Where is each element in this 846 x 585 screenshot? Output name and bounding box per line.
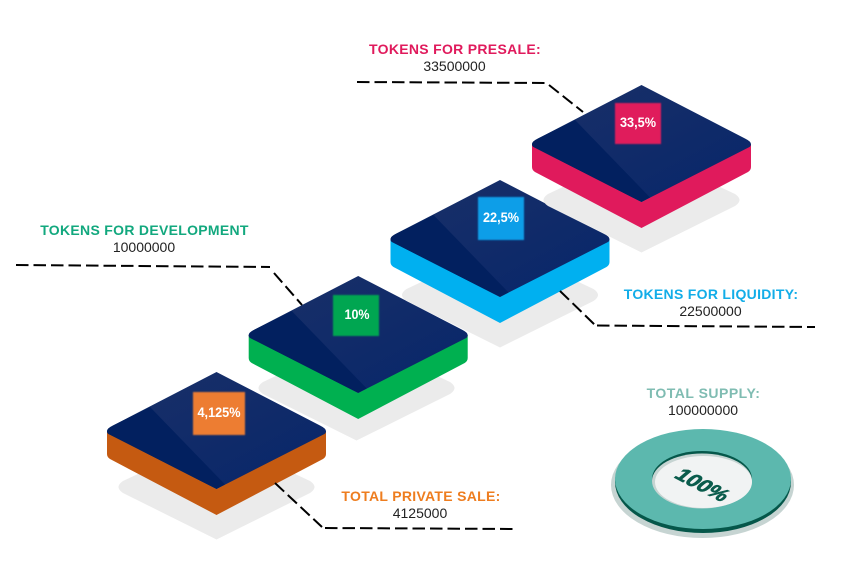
label: tokens for presale [369, 41, 541, 74]
label: tokens for presale: 33500000 [423, 58, 486, 74]
label: total private sale [341, 488, 501, 521]
label: tokens for development [40, 222, 249, 255]
leader line: private sale [275, 483, 514, 529]
leader line: presale [357, 82, 583, 112]
label: total private sale: TOTAL PRIVATE SALE: [341, 488, 501, 504]
badge: 22,5% [478, 197, 524, 240]
donut: total supply 100% [611, 429, 794, 538]
leader line: liquidity [560, 291, 815, 327]
shadow: private sale block [118, 437, 314, 540]
shadow: presale block [544, 150, 740, 252]
donut: total supply 100%: 100% [669, 465, 735, 505]
label: tokens for development: TOKENS FOR DEVELOPMENT [40, 222, 249, 238]
badge: 10% [333, 295, 379, 336]
block: tokens for development 10% [249, 276, 468, 419]
badge: 4,125% [193, 392, 245, 435]
shadow: liquidity block [402, 245, 598, 348]
label: total private sale: 4125000 [393, 505, 447, 521]
leader line: development [16, 265, 302, 305]
label: tokens for liquidity: 22500000 [679, 303, 742, 319]
label: tokens for presale: TOKENS FOR PRESALE: [369, 41, 541, 57]
label: tokens for liquidity: TOKENS FOR LIQUIDITY: [624, 286, 798, 302]
block: tokens for presale 33,5% [532, 85, 751, 228]
badge: 22,5%: 22,5% [483, 209, 519, 225]
label: tokens for liquidity [624, 286, 798, 319]
badge: 10%: 10% [344, 306, 370, 322]
label: total supply: TOTAL SUPPLY: [647, 385, 760, 401]
badge: 33,5%: 33,5% [620, 114, 656, 130]
block: tokens for liquidity 22,5% [390, 180, 610, 323]
shadow: development block [258, 338, 454, 440]
label: total supply [647, 385, 760, 418]
block: total private sale 4,125% [107, 372, 326, 515]
label: total supply: 100000000 [668, 402, 738, 418]
label: tokens for development: 10000000 [113, 239, 175, 255]
badge: 33,5% [615, 103, 661, 144]
badge: 4,125%: 4,125% [198, 404, 241, 420]
